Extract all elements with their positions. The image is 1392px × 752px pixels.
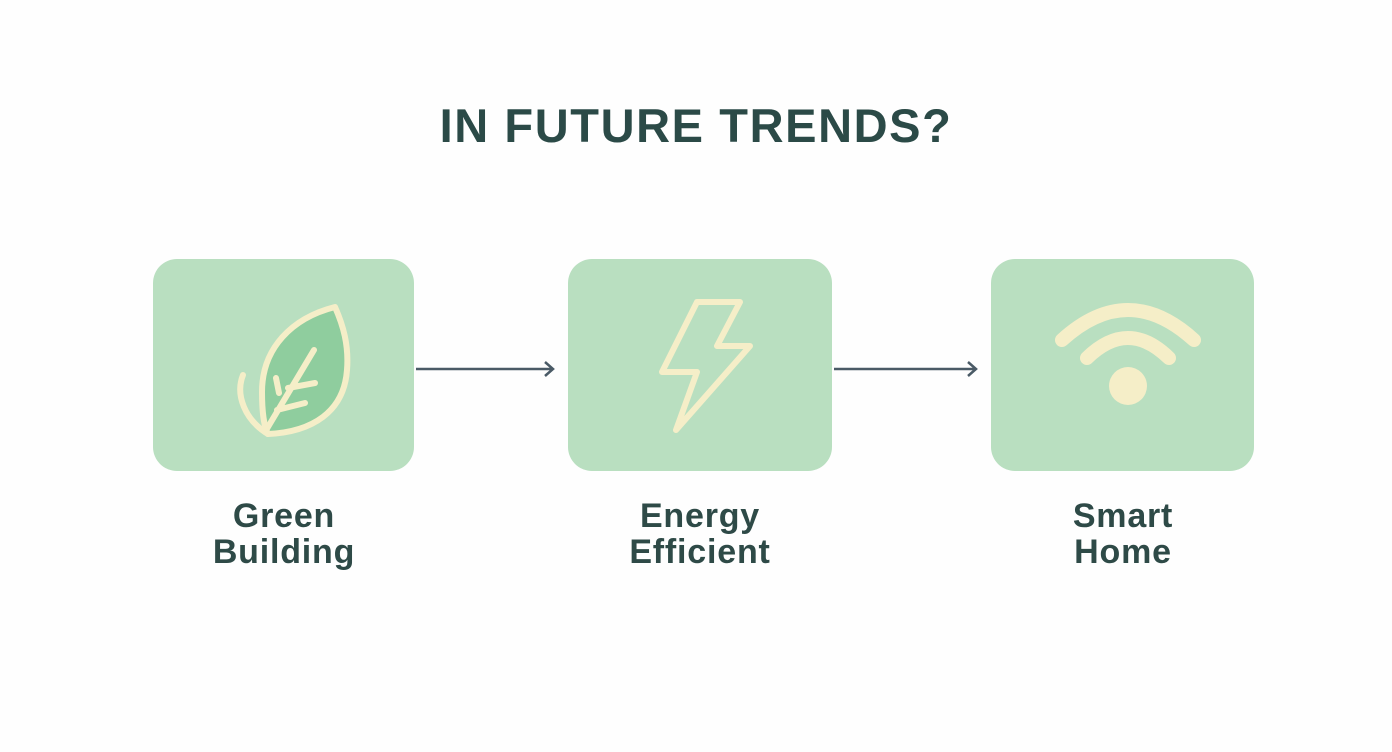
label: green building: [213, 497, 355, 571]
label: energy efficient: [629, 497, 771, 571]
label: energy efficient: Energy: [640, 497, 760, 535]
label: smart home: Home: [1074, 533, 1172, 571]
arrow 2: [834, 361, 978, 377]
label: smart home: Smart: [1073, 497, 1173, 535]
title: IN FUTURE TRENDS?: [440, 99, 952, 152]
panel: smart home: [991, 259, 1254, 471]
icon: leaf: [237, 304, 350, 437]
label: energy efficient: Efficient: [629, 533, 771, 571]
arrow 1: [416, 361, 555, 377]
panel: green building: [153, 259, 414, 471]
icon: lightning: [659, 299, 753, 433]
label: green building: Building: [213, 533, 355, 571]
panel: energy efficient: [568, 259, 832, 471]
icon: wifi: [1055, 303, 1201, 405]
label: smart home: [1073, 497, 1173, 571]
label: green building: Green: [233, 497, 335, 535]
